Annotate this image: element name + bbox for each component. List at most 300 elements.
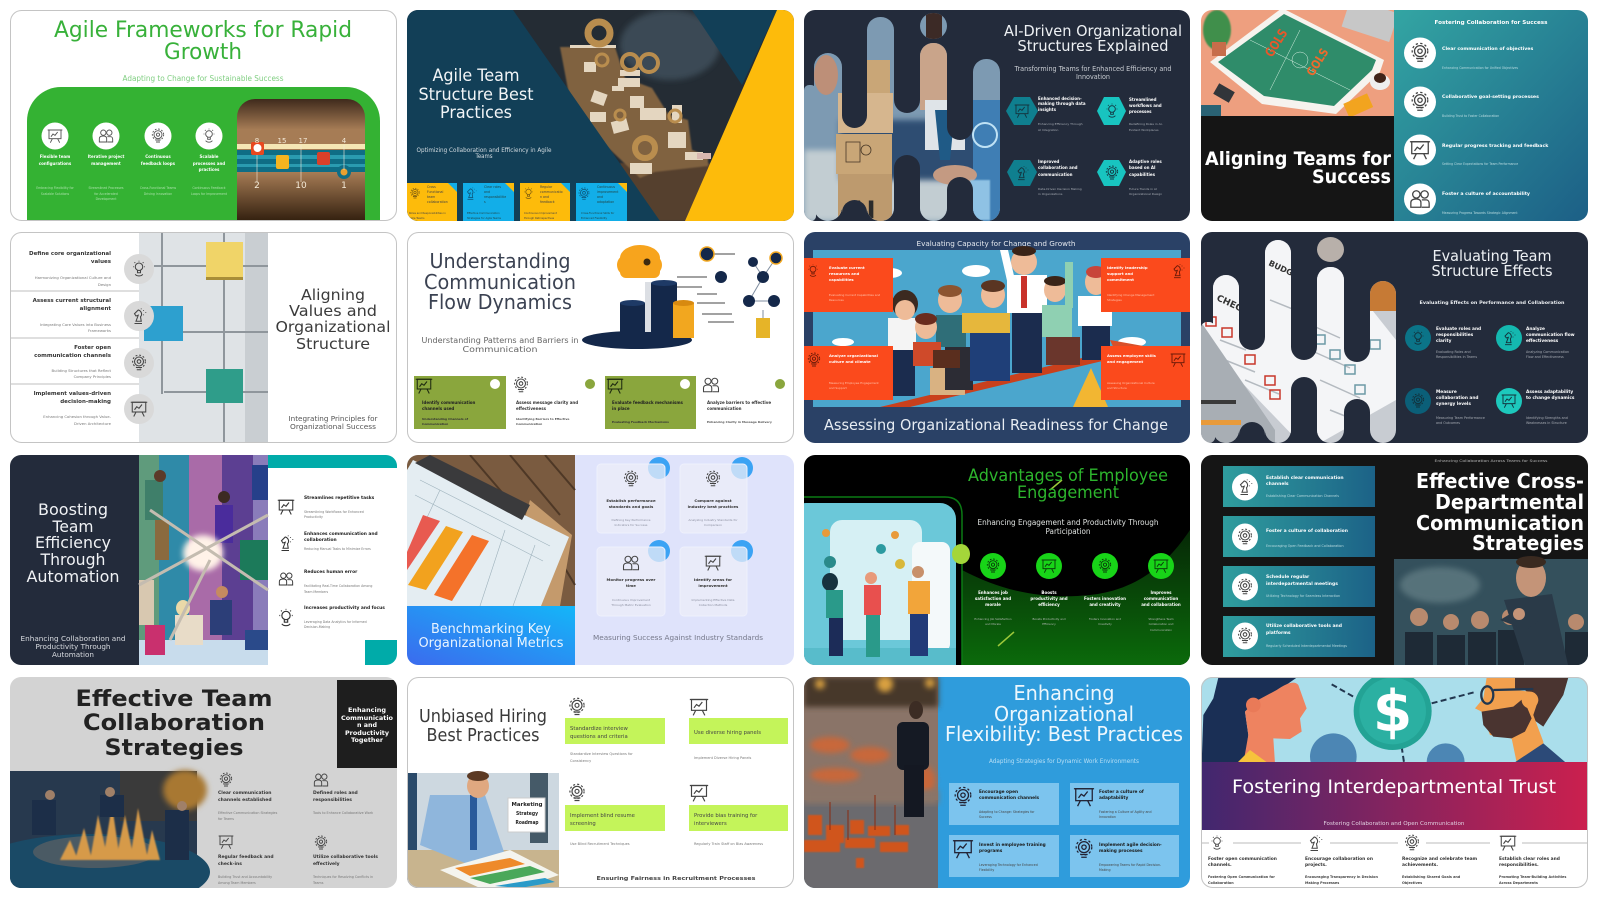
title block bbox=[407, 606, 575, 665]
panel subtitle: Fostering Collaboration for Success bbox=[1434, 20, 1548, 26]
item labels: feedback loops bbox=[141, 161, 176, 166]
photo: boardroom with glowing city model bbox=[0, 770, 210, 900]
item descriptions: Decision-Making bbox=[304, 625, 330, 629]
item icons bbox=[980, 553, 1174, 579]
item labels: capabilities bbox=[1129, 172, 1156, 177]
heading bbox=[276, 286, 390, 353]
glass card: best practices: industry best practices bbox=[688, 504, 739, 509]
heading: Engagement bbox=[1017, 483, 1119, 503]
card: continuous improvement: Cross-Functional Skills for bbox=[581, 211, 615, 215]
card: assess message clarity: Identifying Barriers to Effective bbox=[516, 417, 569, 421]
heading: Communication bbox=[424, 270, 576, 294]
item card: communication channels: channels bbox=[1266, 481, 1289, 487]
panel: Enhancing Organizational Flexibility bbox=[804, 676, 1190, 888]
panel: Benchmarking Key Organizational Metrics bbox=[407, 455, 794, 665]
item icons bbox=[124, 254, 154, 424]
card: standardize interview: questions and criteria bbox=[570, 734, 628, 740]
heading: Departmental bbox=[1435, 490, 1584, 514]
item labels: communication flow bbox=[1526, 332, 1575, 338]
heading: Organizational Metrics bbox=[418, 636, 564, 651]
item card: culture of collaboration: Foster a culture of collaboration bbox=[1266, 528, 1348, 534]
item: clear communication channels bbox=[218, 773, 278, 821]
right teal panel bbox=[1394, 10, 1588, 221]
panel: Unbiased Hiring Best Practices bbox=[407, 677, 794, 888]
item descriptions: Streamlining Workflows for Enhanced bbox=[304, 510, 364, 514]
item: regular feedback: Among Team Members bbox=[218, 881, 256, 885]
item descriptions: Streamlined Processes bbox=[89, 186, 124, 190]
callout: assess employee skills: Assessing Organizational Culture bbox=[1107, 381, 1155, 385]
glass card: performance standards: Establish performance bbox=[606, 498, 656, 503]
photo: man with roadmap bbox=[407, 771, 559, 888]
heading bbox=[945, 681, 1183, 746]
right teal panel bbox=[692, 10, 777, 85]
item labels: and creativity bbox=[1089, 602, 1121, 607]
item descriptions: Driving Innovation bbox=[144, 192, 172, 196]
card: blind resume bbox=[565, 784, 665, 846]
heading: Structure bbox=[296, 335, 370, 353]
card: agile decision-making: Making bbox=[1099, 868, 1110, 872]
item: defined roles bbox=[312, 774, 373, 815]
card: clear roles bbox=[463, 183, 514, 221]
item list: decision-making bbox=[60, 399, 111, 405]
item descriptions bbox=[36, 186, 228, 201]
subtitle bbox=[288, 415, 378, 431]
card: analyze barriers: Analyze barriers to effective bbox=[707, 400, 771, 405]
card: standardize interview bbox=[565, 698, 665, 763]
item labels: satisfaction and bbox=[975, 596, 1011, 601]
item: clear communication channels: channels established bbox=[218, 797, 272, 803]
card: assess message clarity: effectiveness bbox=[516, 406, 547, 411]
illustration: two people and coin: $ bbox=[1373, 679, 1412, 745]
photo: checklist behind pill cut-outs: CHECK bbox=[1215, 294, 1251, 317]
item descriptions: and Outcomes bbox=[1436, 421, 1460, 425]
item labels: Collaborative goal-setting processes bbox=[1442, 94, 1539, 100]
item labels: Improved bbox=[1038, 159, 1060, 164]
glass card: performance standards: standards and goals bbox=[609, 504, 654, 509]
item card: regular meetings: interdepartmental meetings bbox=[1266, 581, 1338, 587]
item labels: and collaboration bbox=[1141, 602, 1181, 607]
card: continuous improvement bbox=[576, 183, 627, 221]
item icons bbox=[1405, 325, 1522, 414]
callout: analyze culture and climate: Analyze organizational bbox=[829, 353, 878, 358]
item card: regular meetings: Utilizing Technology for Seamless Interaction bbox=[1266, 594, 1340, 598]
item labels: Clear communication of objectives bbox=[1442, 46, 1533, 52]
hexagon icons bbox=[1006, 97, 1126, 186]
item labels: Assess adaptability bbox=[1526, 389, 1573, 395]
card: cross-functional collaboration: Cross bbox=[427, 185, 436, 189]
card: adaptability: Innovation bbox=[1099, 815, 1116, 819]
item descriptions bbox=[1442, 66, 1518, 215]
heading: Automation bbox=[26, 567, 120, 586]
glass card: performance standards: Indicators for Success bbox=[615, 523, 648, 527]
item descriptions: Objectives bbox=[1402, 881, 1422, 885]
item labels: configurations bbox=[39, 161, 72, 166]
item: regular feedback bbox=[218, 836, 274, 885]
i-dot bbox=[1317, 237, 1344, 262]
glass card: monitor progress bbox=[597, 547, 665, 616]
subtitle: Innovation bbox=[1076, 73, 1110, 81]
heading: Communication bbox=[1416, 511, 1584, 535]
subtitle: Productivity Through bbox=[36, 643, 110, 651]
item labels: to change dynamics bbox=[1526, 395, 1575, 401]
item card: collaborative tools: Regularly Scheduled Interdepartmental Meetings bbox=[1266, 644, 1347, 648]
subtitle bbox=[422, 336, 579, 354]
card: blind resume: Use Blind Recruitment Techniques bbox=[570, 842, 630, 846]
item list: Design bbox=[98, 282, 112, 287]
item labels: management bbox=[91, 161, 121, 166]
item labels bbox=[304, 495, 385, 611]
illustration: team climbing ramp bbox=[813, 246, 1181, 407]
lime accent bbox=[952, 544, 970, 564]
item labels: Encourage collaboration on bbox=[1305, 856, 1373, 862]
item descriptions: AI Integration bbox=[1038, 128, 1059, 132]
card: cross-functional collaboration: collaboration bbox=[427, 200, 448, 204]
photo: clipboard with bar chart on wood bbox=[407, 455, 575, 606]
photo: man and AI blocks behind pill cut-outs bbox=[804, 10, 1000, 224]
card: assess message clarity bbox=[515, 377, 595, 426]
heading bbox=[420, 68, 534, 118]
callout: identify leadership support: Identify leadership bbox=[1107, 265, 1148, 270]
card: open communication bbox=[949, 783, 1059, 825]
card: cross-functional collaboration: Roles and Responsibilities in bbox=[409, 211, 446, 215]
callout: evaluate current resources: resources and bbox=[829, 271, 860, 276]
callout: identify leadership support: support and bbox=[1107, 271, 1133, 276]
item labels: Iterative project bbox=[88, 154, 124, 159]
card: employee training: Flexibility bbox=[979, 868, 994, 872]
subtitle: Integrating Principles for bbox=[288, 415, 378, 423]
item: clear communication channels: Clear communication bbox=[218, 790, 272, 796]
card: identify communication channels: Identify communication bbox=[422, 400, 476, 405]
item descriptions: Weaknesses in Structure bbox=[1526, 421, 1567, 425]
item labels: Adaptive roles bbox=[1129, 159, 1162, 164]
item card: regular meetings bbox=[1223, 566, 1375, 607]
item descriptions: Across Departments bbox=[1499, 881, 1538, 885]
subtitle: Adapting to Change for Sustainable Success bbox=[122, 74, 284, 83]
item descriptions: Evident Workplaces bbox=[1129, 128, 1159, 132]
heading bbox=[76, 687, 272, 761]
card: regular communication: n and bbox=[540, 195, 549, 199]
item: regular feedback: check-ins bbox=[218, 861, 242, 867]
card: continuous improvement: and bbox=[597, 195, 603, 199]
subtitle: Optimizing Collaboration and Efficiency in Agile bbox=[416, 147, 552, 154]
card: continuous improvement: Continuous bbox=[597, 185, 615, 189]
illustration: people in teal frame bbox=[790, 497, 962, 678]
card: diverse panels bbox=[689, 700, 788, 760]
card: regular communication: through Retrospectives bbox=[524, 216, 555, 220]
glass card: monitor progress: Continuous Improvement bbox=[612, 598, 651, 602]
callout: analyze culture and climate bbox=[804, 346, 893, 400]
card: regular communication: feedback bbox=[540, 200, 555, 204]
item descriptions: Future Trends in AI bbox=[1129, 187, 1157, 191]
panel: Advantages of Employee Engagement bbox=[790, 455, 1190, 678]
photo: wooden gears and papers bbox=[560, 10, 730, 221]
item card: collaborative tools bbox=[1223, 616, 1375, 657]
item labels: Analyze bbox=[1526, 326, 1545, 332]
item descriptions: Loops for Improvement bbox=[191, 192, 228, 196]
subtitle: Participation bbox=[1046, 527, 1091, 536]
item card: communication channels: Establishing Clear Communication Channels bbox=[1266, 494, 1339, 498]
item descriptions: Collaboration and bbox=[1149, 622, 1174, 626]
callout: identify leadership support bbox=[1101, 258, 1190, 312]
item labels bbox=[1208, 856, 1560, 868]
heading bbox=[26, 500, 120, 586]
item descriptions: Flow and Effectiveness bbox=[1526, 355, 1564, 359]
card: employee training bbox=[949, 835, 1059, 877]
heading: Organizational bbox=[276, 318, 390, 336]
heading: Values and bbox=[289, 302, 377, 320]
card: clear roles: and bbox=[484, 190, 490, 194]
card: assess message clarity: Assess message clarity and bbox=[516, 400, 578, 405]
item descriptions: Measuring Progress Towards Strategic Alignment bbox=[1442, 211, 1518, 215]
card: clear roles: Clear roles bbox=[484, 185, 501, 189]
item labels: clarity bbox=[1436, 338, 1452, 344]
item list: Building Structures that Reflect bbox=[52, 368, 112, 373]
card: bias training: interviewers bbox=[694, 821, 727, 827]
glass card: improvement areas: Identify areas for bbox=[694, 577, 732, 582]
photo: goals pitch on desk: GOLS bbox=[1263, 27, 1291, 60]
item: defined roles: Defined roles and bbox=[313, 790, 358, 796]
item labels bbox=[975, 590, 1181, 607]
title block bbox=[1201, 116, 1394, 221]
subtitle block: Communicatio bbox=[341, 714, 394, 722]
item: regular feedback: Building Trust and Accountability bbox=[218, 875, 272, 879]
subtitle: Fostering Collaboration and Open Communication bbox=[1324, 821, 1465, 827]
card: adaptability: adaptability bbox=[1099, 795, 1128, 801]
photo: goals pitch on desk bbox=[1201, 10, 1394, 116]
item icons bbox=[42, 122, 222, 150]
subtitle: Transforming Teams for Enhanced Efficiency and bbox=[1014, 65, 1172, 73]
panel: Aligning Teams for Success bbox=[1201, 0, 1588, 221]
item labels: Enhances job bbox=[978, 590, 1008, 595]
heading: AI-Driven Organizational bbox=[1004, 22, 1182, 40]
heading: Growth bbox=[164, 40, 242, 65]
card: assess message clarity: Communication bbox=[516, 422, 542, 426]
item descriptions: Measuring Team Performance bbox=[1436, 416, 1485, 420]
heading: Understanding bbox=[430, 249, 570, 273]
item descriptions: Making Processes bbox=[1305, 881, 1339, 885]
glass card: best practices bbox=[680, 464, 747, 533]
panel: Aligning Values and Organizational Structure bbox=[10, 232, 397, 443]
photo: figure on city map bbox=[804, 676, 938, 888]
heading: Advantages of Employee bbox=[968, 466, 1168, 486]
heading: Flexibility: Best Practices bbox=[945, 722, 1183, 746]
item descriptions: Organizational Design bbox=[1129, 192, 1162, 196]
item list: Enhancing Cohesion through Value- bbox=[43, 414, 112, 419]
heading: Agile Team bbox=[432, 66, 520, 86]
item descriptions: Continuous Feedback bbox=[192, 186, 226, 190]
card: adaptability: Foster a culture of bbox=[1099, 789, 1144, 795]
card: agile decision-making: Implement agile decision- bbox=[1099, 842, 1162, 848]
glass card: monitor progress: time bbox=[626, 583, 636, 588]
heading: Success bbox=[1312, 166, 1391, 188]
item card: culture of collaboration: Encouraging Open Feedback and Collaboration bbox=[1266, 544, 1344, 548]
item labels: Streamlined bbox=[1129, 97, 1157, 102]
card: adaptability: Fostering a Culture of Agility and bbox=[1099, 810, 1151, 814]
item card: communication channels bbox=[1223, 466, 1375, 507]
item descriptions bbox=[1038, 122, 1163, 196]
item descriptions: Communication bbox=[1150, 628, 1172, 632]
item descriptions: Efficiency bbox=[1042, 622, 1056, 626]
item labels: collaboration and bbox=[1038, 165, 1078, 170]
item descriptions: Embracing Flexibility for bbox=[36, 186, 75, 190]
item labels: Evaluate roles and bbox=[1436, 326, 1481, 332]
item descriptions: Fosters Innovation and bbox=[1089, 617, 1121, 621]
title band bbox=[1201, 762, 1588, 830]
item descriptions: Enhancing Efficiency Through bbox=[1038, 122, 1083, 126]
teal corner block bbox=[365, 640, 397, 665]
heading bbox=[1416, 469, 1584, 555]
card: identify communication channels: Understanding Channels of bbox=[422, 417, 469, 421]
subtitle: Automation bbox=[52, 651, 94, 659]
item descriptions: Building Trust to Foster Collaboration bbox=[1442, 114, 1499, 118]
photo: goals pitch on desk: GOLS bbox=[1304, 46, 1331, 79]
heading: Agile Frameworks for Rapid bbox=[54, 18, 352, 43]
panel: Effective Cross-Departmental Communication Strategies bbox=[1201, 455, 1588, 665]
heading: Enhancing bbox=[1014, 681, 1114, 705]
subtitle: Enhancing Engagement and Productivity Through bbox=[978, 518, 1159, 527]
heading: Structure Effects bbox=[1432, 262, 1553, 280]
item: collaborative tools: Techniques for Resolving Conflicts in bbox=[312, 875, 373, 879]
item descriptions: Analyzing Communication bbox=[1526, 350, 1569, 354]
item descriptions: Data-Driven Decision Making bbox=[1038, 187, 1082, 191]
subtitle: Understanding Patterns and Barriers in bbox=[422, 336, 579, 345]
item: collaborative tools: Utilize collaborative tools bbox=[313, 854, 378, 860]
item labels: Foster open communication bbox=[1208, 856, 1277, 862]
item list: communication channels bbox=[34, 353, 112, 359]
callout: assess employee skills: Assess employee skills bbox=[1107, 353, 1157, 358]
card: open communication: Success bbox=[979, 815, 992, 819]
photo: man with roadmap: Marketing bbox=[512, 802, 543, 808]
panel: Effective Team Collaboration Strategies bbox=[0, 677, 397, 900]
top subtitle: Enhancing Collaboration Across Teams for Success bbox=[1434, 459, 1548, 463]
item list: Driven Architecture bbox=[74, 421, 112, 426]
callout: evaluate current resources: Evaluate current bbox=[829, 265, 865, 270]
heading: Best Practices bbox=[426, 725, 540, 746]
card: open communication: communication channels bbox=[979, 795, 1040, 801]
panel: Agile Frameworks for Rapid Growth bbox=[27, 20, 380, 220]
item labels: Flexible team bbox=[40, 154, 70, 159]
card: continuous improvement: Enhanced Flexibility bbox=[581, 216, 607, 220]
item labels bbox=[1436, 326, 1575, 407]
subtitle block: Together bbox=[351, 736, 384, 744]
glass card: performance standards: Defining Key Performance bbox=[612, 518, 651, 522]
item labels: Continuous bbox=[145, 154, 171, 159]
card: analyze barriers: Enhancing Clarity in Message Delivery bbox=[707, 420, 772, 424]
item list: Implement values-driven bbox=[34, 391, 111, 397]
item list: Frameworks bbox=[88, 328, 111, 333]
photo: sticky notes on wall bbox=[139, 232, 268, 443]
heading bbox=[419, 706, 547, 746]
item labels: communication bbox=[1144, 596, 1178, 601]
item: collaborative tools bbox=[312, 836, 378, 885]
callout: identify leadership support: commitment bbox=[1107, 277, 1134, 282]
subtitle: Evaluating Effects on Performance and Collaboration bbox=[1420, 300, 1564, 306]
subtitle block: n and bbox=[357, 721, 377, 729]
heading: Unbiased Hiring bbox=[419, 706, 547, 727]
item labels: responsibilities. bbox=[1499, 862, 1539, 868]
heading bbox=[1004, 24, 1181, 54]
card: evaluate feedback mechanisms bbox=[605, 376, 696, 429]
callout: analyze culture and climate: and Support bbox=[829, 386, 848, 390]
timeline with icons bbox=[1201, 835, 1588, 850]
item labels: communication bbox=[1038, 172, 1073, 177]
item: defined roles: responsibilities bbox=[313, 797, 352, 803]
photo: checklist behind pill cut-outs: BUDGET bbox=[1267, 259, 1305, 283]
callout: assess employee skills bbox=[1101, 346, 1190, 400]
callout: assess employee skills: and engagement bbox=[1107, 359, 1143, 364]
heading bbox=[968, 466, 1168, 503]
subtitle bbox=[416, 147, 552, 158]
card: regular communication: Continuous Improvement bbox=[524, 211, 557, 215]
item labels: Enhances communication and bbox=[304, 531, 378, 537]
card: open communication: Adapting to Change: Strategies for bbox=[979, 810, 1035, 814]
item labels: Recognize and celebrate team bbox=[1402, 856, 1478, 862]
subtitle: Organizational Success bbox=[290, 423, 376, 431]
card: bias training: Provide bias training for bbox=[694, 813, 758, 819]
item descriptions bbox=[1436, 350, 1569, 425]
item descriptions: Productivity bbox=[304, 515, 323, 519]
item card: regular meetings: Schedule regular bbox=[1266, 574, 1310, 580]
glass card: improvement areas bbox=[680, 547, 747, 616]
card: bias training: Regularly Train Staff on Bias Awareness bbox=[694, 842, 763, 846]
glass card: monitor progress: Monitor progress over bbox=[607, 577, 656, 582]
card: evaluate feedback mechanisms: Evaluate feedback mechanisms bbox=[612, 400, 684, 405]
item: regular feedback: Regular feedback and bbox=[218, 854, 274, 860]
item descriptions: Facilitating Real-Time Collaboration Among bbox=[304, 584, 372, 588]
photo: man with roadmap: Strategy bbox=[516, 811, 539, 817]
item labels: Regular progress tracking and feedback bbox=[1442, 143, 1549, 149]
item labels: Boosts bbox=[1041, 590, 1057, 595]
item list: alignment bbox=[80, 306, 111, 312]
callout: evaluate current resources: capabilities bbox=[829, 277, 854, 282]
item labels: practices bbox=[199, 167, 220, 172]
item labels: processes bbox=[1129, 109, 1152, 114]
item list: values bbox=[91, 259, 112, 265]
item descriptions bbox=[303, 510, 372, 629]
photo: wooden timeline: 4 bbox=[342, 137, 347, 145]
item card: collaborative tools: platforms bbox=[1266, 630, 1291, 636]
glass card: improvement areas: improvement bbox=[698, 583, 728, 588]
photo: wooden timeline: 8 bbox=[255, 137, 259, 145]
item labels: Scalable bbox=[200, 154, 219, 159]
panel: AI-Driven Organizational Structures Explained bbox=[804, 10, 1190, 221]
card: cross-functional collaboration bbox=[407, 183, 457, 221]
card: clear roles: Strategies for Agile Teams bbox=[467, 216, 502, 220]
heading: Aligning bbox=[301, 286, 365, 304]
heading: Effective Team bbox=[76, 687, 272, 712]
card: analyze barriers: communication bbox=[707, 406, 742, 411]
item labels: insights bbox=[1038, 107, 1057, 112]
item labels: effectiveness bbox=[1526, 338, 1559, 344]
dark pills over photo bbox=[1239, 200, 1370, 472]
card: diverse panels: Use diverse hiring panels bbox=[694, 730, 761, 736]
callout: evaluate current resources bbox=[804, 258, 893, 312]
item: collaborative tools: effectively bbox=[313, 861, 340, 867]
card: identify communication channels: Communication bbox=[422, 422, 448, 426]
heading: Flow Dynamics bbox=[428, 290, 572, 314]
item labels: processes and bbox=[193, 161, 225, 166]
item descriptions: Strengthens Team bbox=[1148, 617, 1174, 621]
heading: Aligning Teams for bbox=[1205, 148, 1392, 170]
subtitle: Measuring Success Against Industry Standards bbox=[593, 634, 763, 642]
card: employee training: programs bbox=[979, 848, 1003, 854]
heading: Boosting bbox=[38, 500, 108, 519]
item labels: Increases productivity and focus bbox=[304, 605, 385, 611]
item descriptions: Creativity bbox=[1098, 622, 1112, 626]
heading: Collaboration bbox=[83, 711, 265, 736]
left teal panel bbox=[407, 10, 660, 221]
panel: Understanding Communication Flow Dynamics bbox=[407, 232, 794, 443]
